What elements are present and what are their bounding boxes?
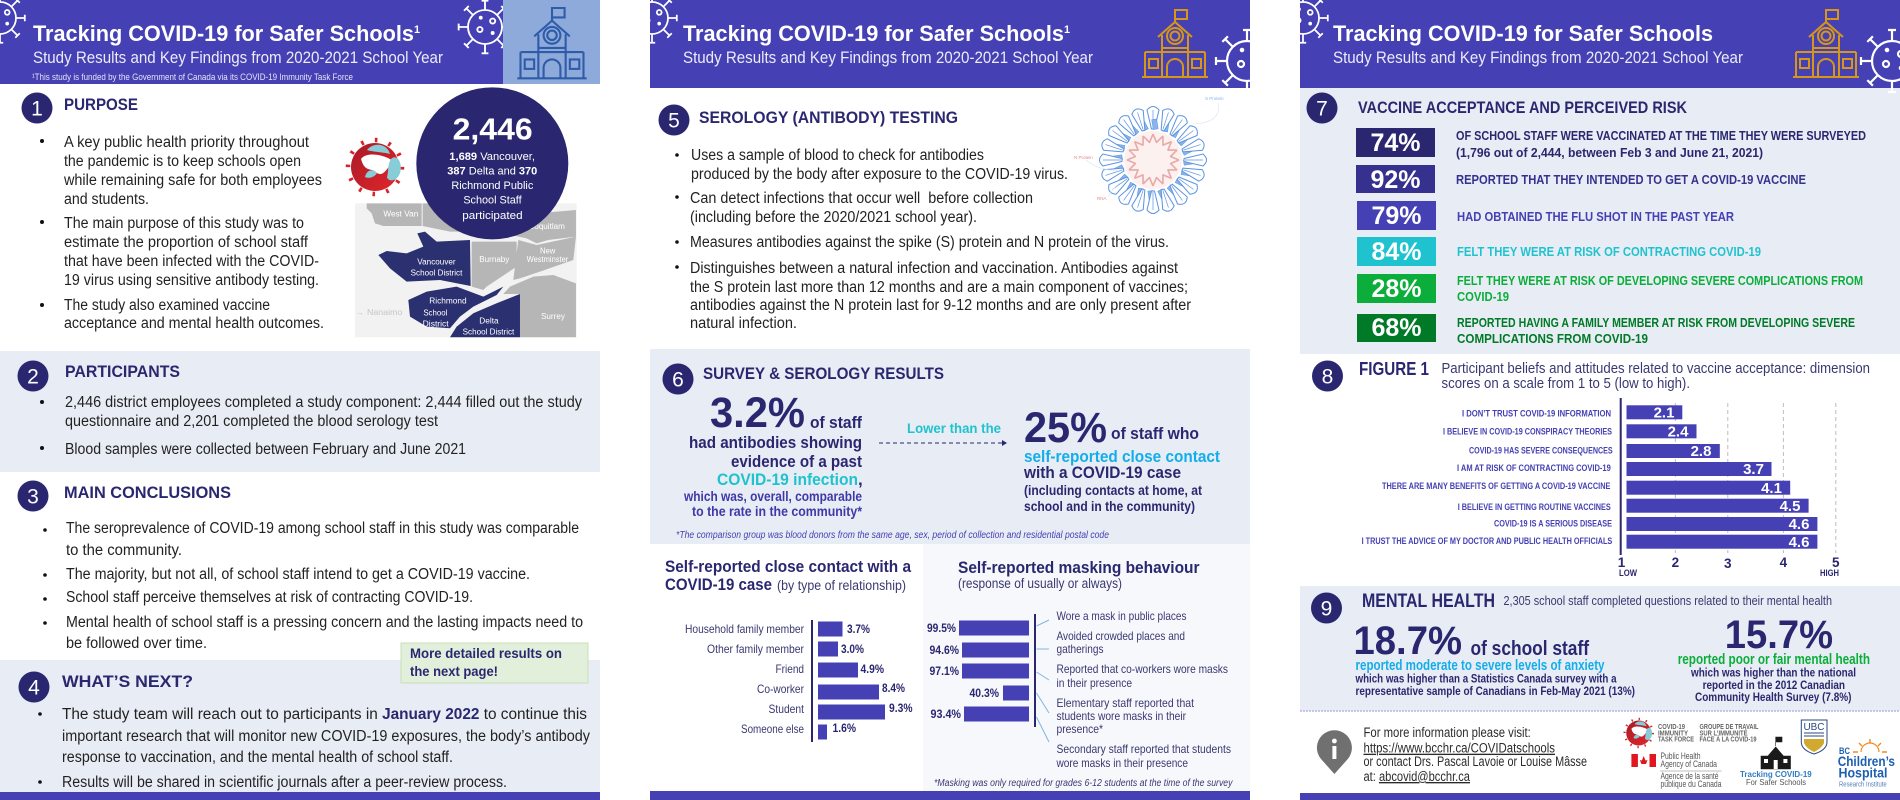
map of school districts [355,87,577,337]
text block: serology bullets: Distinguishes between a natural infection and vaccination. Antibodies against [690,260,1179,277]
stat: 18.7% anxiety: of school staff [1470,638,1589,660]
section 9 band: mental health [1300,586,1900,711]
section 4 number [18,672,50,702]
section 4 band: what's next [0,660,600,792]
section 2 number [18,360,48,392]
text block: serology bullets: Can detect infections that occur well before collection [690,190,1033,207]
callout: more detailed results: More detailed results on [410,646,562,661]
section 9 number [1311,592,1342,624]
bar chart: beliefs and attitudes: 3.7 [1743,461,1764,478]
map of school districts: Burnaby [479,255,509,264]
chart title: Self-reported close contact with a [665,558,912,576]
logo: tracking COVID-19 school: Tracking COVID-19 [1740,769,1812,779]
section 8 number [1312,360,1343,392]
bar chart: beliefs and attitudes: COVID-19 HAS SEVERE CONSEQUENCES [1469,444,1613,455]
callout circle: 2,446 participants: 2,446 [453,112,533,146]
bar chart: beliefs and attitudes: 4 [1780,555,1788,570]
heading: figure 1: Participant beliefs and attitudes related to vaccine acceptance: dimension [1442,361,1870,377]
section 2 number: 2 [27,366,39,388]
logo: UBC shield: UBC [1804,722,1824,733]
stat: 15.7% poor or fair mental health [1678,613,1870,704]
text block: conclusions bullets: School staff perceive themselves at risk of contracting COVID-19. [66,589,473,606]
stat: 3.2% of staff had antibodies: of staff [810,413,862,432]
logo: BC Children's Hospital [1838,739,1895,789]
icon: information pin [1317,730,1352,774]
bar chart: beliefs and attitudes: I AM AT RISK OF CONTRACTING COVID-19 [1457,462,1611,473]
masking item labels: Avoided crowded places and [1056,629,1185,643]
bar chart: masking: 40.3% [970,686,999,700]
bar chart: beliefs and attitudes: I BELIEVE IN COVID-19 CONSPIRACY THEORIES [1443,425,1612,436]
header banner page 1 [0,0,600,84]
bar chart: beliefs and attitudes: 4.6 [1789,516,1809,533]
section 6 number: 6 [672,368,684,392]
contact information [1364,725,1587,784]
stat: 15.7% poor or fair mental health: Community Health Survey (7.8%) [1695,692,1852,704]
bar chart: close contact: 3.0% [841,642,864,656]
title: Tracking COVID-19 for Safer Schools [683,21,1069,46]
contact information: https://www.bcchr.ca/COVIDatschools [1364,741,1555,756]
text block: conclusions bullets [43,520,583,652]
icon: virus left [1278,0,1328,43]
header banner page 2 [627,0,1278,92]
bar chart: beliefs and attitudes: 3 [1724,556,1732,571]
icon: immunity task force virus logo [348,140,402,194]
bar chart: close contact: Household family member [685,622,804,636]
stat: 3.2% of staff had antibodies: , [858,470,863,489]
subtitle: Study Results and Key Findings from 2020-2021 School Year [683,48,1093,67]
callout circle: 2,446 participants: School Staff [463,194,523,206]
bar chart: masking [927,614,1049,742]
icon: virus right [459,1,511,53]
bar chart: beliefs and attitudes: 5 [1832,555,1840,570]
text block: serology bullets: produced by the body after exposure to the COVID-19 virus. [691,166,1068,183]
heading: purpose: PURPOSE [64,95,138,114]
bar chart: beliefs and attitudes: LOW [1619,568,1637,579]
stat: 15.7% poor or fair mental health: reported in the 2012 Canadian [1703,680,1845,692]
chart title: (response of usually or always) [958,576,1122,591]
section 2 band: participants [0,351,600,472]
stat: 25% of staff self-reported close contact: school and in the community) [1024,498,1195,514]
chart title: COVID-19 case [665,576,772,594]
map of school districts: Vancouver [417,258,456,267]
bar chart: masking: 97.1% [930,664,959,678]
illustration: coronavirus structure: RNA [1097,196,1107,201]
heading: figure 1: FIGURE 1 [1359,359,1429,379]
map of school districts: Richmond [429,297,467,306]
chart title: Self-reported masking behaviour [958,559,1200,577]
text block: purpose bullets: A key public health priority throughout [64,134,310,151]
heading: serology testing: SEROLOGY (ANTIBODY) TESTING [699,108,958,127]
masking item labels: Wore a mask in public places [1056,609,1186,623]
stat row: 84% [1357,237,1761,266]
heading: mental health: 2,305 school staff completed questions related to their mental health [1504,593,1832,608]
arrow: lower than the [879,420,1007,446]
bar chart: close contact: 8.4% [882,681,905,695]
bar chart: masking: 93.4% [930,707,961,721]
bar chart: beliefs and attitudes: I TRUST THE ADVICE OF MY DOCTOR AND PUBLIC HEALTH OFFICIALS [1362,535,1612,546]
footer bar page 2 [650,791,1250,800]
stat row: 92%: 92% [1370,166,1421,194]
section 3 number [18,480,48,512]
section 4 number: 4 [28,676,40,700]
map of school districts: New [540,246,556,255]
logo: COVID-19 immunity task force [1625,719,1759,747]
contact information: at: abcovid@bcchr.ca [1364,769,1470,784]
callout circle: 2,446 participants: participated [462,210,523,222]
stat: 25% of staff self-reported close contact: of staff who [1111,424,1199,443]
text block: next steps bullets: important research that will monitor new COVID-19 exposures, the body’s antibody [62,728,590,745]
text block: conclusions bullets: be followed over time. [66,635,207,652]
text block: purpose bullets: while remaining safe for both employees [63,172,322,189]
callout circle: 2,446 participants [416,87,568,239]
logo: BC Children's Hospital: BC [1839,746,1850,756]
text block: serology bullets: Uses a sample of blood to check for antibodies [691,147,984,164]
bar chart: beliefs and attitudes [1362,398,1840,579]
header banner page 3 [1278,0,1900,92]
masking item labels: in their presence [1056,676,1132,690]
logo: Public Health Agency of Canada: Agency of Canada [1660,759,1717,769]
masking item labels: gatherings [1056,642,1104,656]
text block: participants bullets [40,394,582,458]
logo: COVID-19 immunity task force: SUR L’IMMUNITÉ [1700,728,1748,738]
title: 1 [414,24,420,36]
map of school districts: School [423,308,448,317]
map of school districts: Westminster [527,255,569,264]
heading: what's next: WHAT’S NEXT? [62,672,193,691]
illustration: coronavirus structure [1074,96,1224,216]
subtitle: Study Results and Key Findings from 2020-2021 School Year [33,48,443,67]
text block: participants bullets: questionnaire and 2,201 completed the blood serology test [65,413,439,430]
bar chart: beliefs and attitudes: 2.4 [1668,424,1689,440]
section 5 number [658,104,690,136]
text block: serology bullets: the S protein last more than 12 months and are a main component of vaccines; [690,279,1188,296]
bar chart: masking: 99.5% [927,621,956,635]
logo: COVID-19 immunity task force: IMMUNITY [1658,730,1688,738]
callout circle: 2,446 participants: 387 Delta and 370 [447,166,537,178]
bar chart: beliefs and attitudes: I BELIEVE IN GETTING ROUTINE VACCINES [1458,501,1611,512]
stat: 3.2% of staff had antibodies: to the rate in the community* [692,503,862,519]
panel 2: serology and survey results [627,0,1278,800]
logo: BC Children's Hospital: Hospital [1838,765,1888,781]
icon: school on light box [503,0,600,84]
section 3 number: 3 [27,486,39,508]
title: 1 [1064,24,1070,36]
masking item labels: Elementary staff reported that [1056,696,1195,710]
stat: 18.7% anxiety: representative sample of Canadians in Feb-May 2021 (13%) [1356,686,1635,698]
stat row: 74%: 74% [1370,129,1421,157]
stat: 25% of staff self-reported close contact [1023,404,1220,514]
section 1 number: 1 [31,98,43,120]
map of school districts: West Van [383,210,418,219]
map of school districts: Surrey [541,312,565,321]
contact information: or contact Drs. Pascal Lavoie or Louise Mâsse [1364,754,1587,769]
logo: UBC shield [1801,720,1827,754]
logo: Public Health Agency of Canada: publique du Canada [1660,779,1722,789]
stat row: 84%: 84% [1371,238,1422,266]
map of school districts: Coquitlam [528,222,565,231]
stat row: 28%: COVID-19 [1457,290,1509,304]
stat row: 68% [1357,314,1855,346]
icon: school gold [1142,10,1208,77]
text block: participants bullets: 2,446 district employees completed a study component: 2,444 filled out the study [65,394,582,411]
text block: purpose bullets: and students. [64,191,149,208]
heading: mental health: MENTAL HEALTH [1362,591,1495,612]
section 1 number [22,92,52,124]
stat: 25% of staff self-reported close contact: (including contacts at home, at [1024,482,1202,498]
bar chart: close contact [685,620,913,742]
stat: 3.2% of staff had antibodies: 3.2% [710,389,805,437]
chart title: (by type of relationship) [777,578,906,593]
logo: tracking COVID-19 school [1740,737,1812,787]
map of school districts: School District [411,269,463,278]
stat row: 79%: HAD OBTAINED THE FLU SHOT IN THE PAST YEAR [1457,210,1734,224]
section 9 number: 9 [1321,598,1332,620]
illustration: coronavirus structure: N Protein [1074,155,1093,160]
bar chart: close contact: Student [768,702,805,716]
bar chart: beliefs and attitudes: I DON’T TRUST COVID-19 INFORMATION [1462,407,1611,418]
text block: serology bullets [675,147,1191,332]
text block: purpose bullets: 19 virus using sensitive antibody testing. [64,272,319,289]
logo: COVID-19 immunity task force: COVID-19 [1658,724,1685,731]
section 7 number: 7 [1316,98,1328,120]
stat: 3.2% of staff had antibodies: which was, overall, comparable [683,488,862,504]
bar chart: close contact: 3.7% [847,622,870,636]
text block: purpose bullets: The study also examined vaccine [64,297,270,314]
stat: 3.2% of staff had antibodies: evidence of a past [731,453,862,471]
text block: purpose bullets [40,134,324,332]
logo: Public Health Agency of Canada [1631,751,1722,789]
stat row: 74% [1356,128,1866,160]
stat: 18.7% anxiety: reported moderate to severe levels of anxiety [1356,658,1604,674]
bar chart: beliefs and attitudes: 4.1 [1761,480,1782,497]
bar chart: beliefs and attitudes: 4.5 [1780,498,1800,515]
logo: COVID-19 immunity task force: GROUPE DE TRAVAIL [1700,724,1759,731]
contact information: For more information please visit: [1364,725,1531,740]
map of school districts: District [423,320,449,329]
callout: more detailed results [401,643,588,683]
stat: 18.7% anxiety [1354,619,1635,698]
bar chart: close contact: 9.3% [889,701,913,715]
map of school districts: → Nanaimo [356,308,403,317]
text block: participants bullets: Blood samples were collected between February and June 2021 [65,441,466,458]
arrow: lower than the: Lower than the [907,420,1001,436]
text block: next steps bullets: Results will be shared in scientific journals after a peer-review process. [62,774,507,791]
section 7 number [1306,92,1338,124]
icon: virus right [1216,30,1278,92]
bar chart: close contact: Other family member [707,642,804,656]
stat: 3.2% of staff had antibodies [683,389,863,519]
text block: purpose bullets: The main purpose of this study was to [64,215,304,232]
bar chart: beliefs and attitudes: 1 [1618,555,1626,570]
callout: more detailed results: the next page! [410,664,498,679]
stat: 18.7% anxiety: 18.7% [1354,619,1462,663]
logo: COVID-19 immunity task force: FACE À LA COVID-19 [1700,734,1757,744]
bar chart: beliefs and attitudes: THERE ARE MANY BENEFITS OF GETTING A COVID-19 VACCINE [1382,480,1610,491]
heading: figure 1: scores on a scale from 1 to 5 (low to high). [1442,376,1690,392]
section 6 number [662,364,694,394]
stat row: 28% [1357,274,1863,304]
icon: virus left [627,0,677,43]
masking item labels: presence* [1056,722,1103,736]
bar chart: close contact: Co-worker [757,682,804,696]
masking item labels [1056,609,1231,770]
section 8 number: 8 [1322,366,1333,388]
text block: conclusions bullets: The seroprevalence of COVID-19 among school staff in this study was comparable [66,520,579,537]
text block: next steps bullets: response to vaccination, and the mental health of school staff. [62,749,453,766]
funding footnote: ¹This study is funded by the Government of Canada via its COVID-19 Immunity Task Force [32,72,353,82]
text block: serology bullets: Measures antibodies against the spike (S) protein and N protein of the virus. [690,234,1169,251]
stat: 25% of staff self-reported close contact: self-reported close contact [1024,447,1220,466]
bar chart: beliefs and attitudes: COVID-19 IS A SERIOUS DISEASE [1494,518,1612,529]
text block: purpose bullets: that have been infected with the COVID- [64,253,319,270]
text block: next steps bullets [38,706,590,791]
logo: Public Health Agency of Canada: Public Health [1660,751,1700,761]
bar chart: close contact: Someone else [741,722,804,736]
chart title [665,558,912,594]
bar chart: masking: 94.6% [930,643,959,657]
heading: survey and serology results: SURVEY & SEROLOGY RESULTS [703,364,944,383]
text block: serology bullets: natural infection. [690,315,797,332]
stat row: 28%: 28% [1371,275,1422,303]
text block: purpose bullets: estimate the proportion of school staff [64,234,309,251]
stat row: 84%: FELT THEY WERE AT RISK OF CONTRACTING COVID-19 [1457,245,1761,259]
heading: figure 1 [1359,359,1870,392]
text block: purpose bullets: the pandemic is to keep schools open [64,153,301,170]
text block: conclusions bullets: Mental health of school staff is a pressing concern and the lasting impacts need to [66,614,583,631]
logo: COVID-19 immunity task force: TASK FORCE [1658,736,1694,744]
stat: 25% of staff self-reported close contact: 25% [1024,404,1107,452]
text block: conclusions bullets: The majority, but not all, of school staff intend to get a COVID-19 vaccine. [66,566,530,583]
map of school districts: School District [463,328,515,337]
bar chart: beliefs and attitudes: 2.8 [1691,443,1711,460]
chart panel: close contact by relationship [650,544,923,791]
bar chart: close contact: 4.9% [860,662,884,676]
bar chart: beliefs and attitudes: 2 [1672,555,1679,570]
icon: virus right [1861,30,1900,92]
text block: conclusions bullets: to the community. [66,542,182,559]
stat row: 79% [1357,201,1734,230]
bar chart: beliefs and attitudes: HIGH [1820,568,1839,579]
heading: mental health [1362,591,1832,612]
stat: 18.7% anxiety: which was higher than a Statistics Canada survey with a [1355,674,1617,686]
stat: 25% of staff self-reported close contact: with a COVID-19 case [1023,463,1181,482]
text block: serology bullets: (including before the 2020/2021 school year). [690,209,977,226]
bar chart: close contact: Friend [776,662,804,676]
heading: vaccine acceptance: VACCINE ACCEPTANCE AND PERCEIVED RISK [1358,98,1688,117]
masking item labels: students wore masks in their [1056,709,1186,723]
panel 1: purpose, participants, conclusions, next steps [0,0,600,800]
stat: 15.7% poor or fair mental health: which was higher than the national [1690,668,1856,680]
title: Tracking COVID-19 for Safer Schools [33,21,419,46]
footer bar page 3 [1300,793,1900,800]
icon: school gold [1793,10,1859,77]
masking item labels: wore masks in their presence [1056,756,1188,770]
map of school districts: Delta [479,317,499,326]
stat row: 74%: (1,796 out of 2,444, between Feb 3 and June 21, 2021) [1456,146,1763,160]
icon: virus left [0,0,25,43]
text block: next steps bullets: The study team will reach out to participants in January 2022 to continue this [62,706,587,723]
stat: 3.2% of staff had antibodies: had antibodies showing [689,434,862,452]
section 7 band background [1300,88,1900,354]
masking item labels: Reported that co-workers wore masks [1056,662,1228,676]
footnote: comparison group: *The comparison group was blood donors from the same age, sex, period of collection and residential postal code [676,530,1109,541]
stat: 3.2% of staff had antibodies: COVID-19 infection [717,470,858,489]
logo: BC Children's Hospital: Research Institute [1839,782,1887,789]
section 6 band: survey and serology results [650,349,1250,544]
stat row: 68%: COMPLICATIONS FROM COVID-19 [1457,332,1648,346]
text block: serology bullets: antibodies against the N protein last for 9-12 months and are only present after [690,297,1191,314]
stat row: 79%: 79% [1371,202,1422,230]
illustration: coronavirus structure: S Protein [1205,96,1224,101]
masking item labels: Secondary staff reported that students [1056,742,1231,756]
logo: Public Health Agency of Canada: Agence de la santé [1660,771,1718,781]
subtitle: Study Results and Key Findings from 2020-2021 School Year [1333,48,1743,67]
footnote: masking: *Masking was only required for grades 6-12 students at the time of the survey [934,778,1233,789]
stat row: 68%: 68% [1371,314,1422,342]
stat row: 92% [1356,165,1806,194]
chart panel: masking behaviour [923,544,1250,791]
panel 3: vaccine acceptance, figure, mental health [1278,0,1900,800]
heading: main conclusions: MAIN CONCLUSIONS [64,483,231,502]
bar chart: close contact: 1.6% [832,721,856,735]
callout circle: 2,446 participants: 1,689 Vancouver, [449,151,535,163]
bar chart: beliefs and attitudes: 2.1 [1654,404,1674,422]
heading: participants: PARTICIPANTS [65,362,180,381]
title: Tracking COVID-19 for Safer Schools [1333,21,1713,46]
chart title [958,559,1200,591]
text block: purpose bullets: acceptance and mental health outcomes. [64,315,324,332]
stat row: 92%: REPORTED THAT THEY INTENDED TO GET A COVID-19 VACCINE [1456,173,1806,187]
section 5 number: 5 [668,110,680,132]
logo: tracking COVID-19 school: For Safer Schools [1746,778,1806,787]
footer bar page 1 [0,792,600,800]
bar chart: beliefs and attitudes: 4.6 [1789,534,1809,551]
stat: 15.7% poor or fair mental health: 15.7% [1725,613,1833,657]
callout circle: 2,446 participants: Richmond Public [451,180,534,192]
